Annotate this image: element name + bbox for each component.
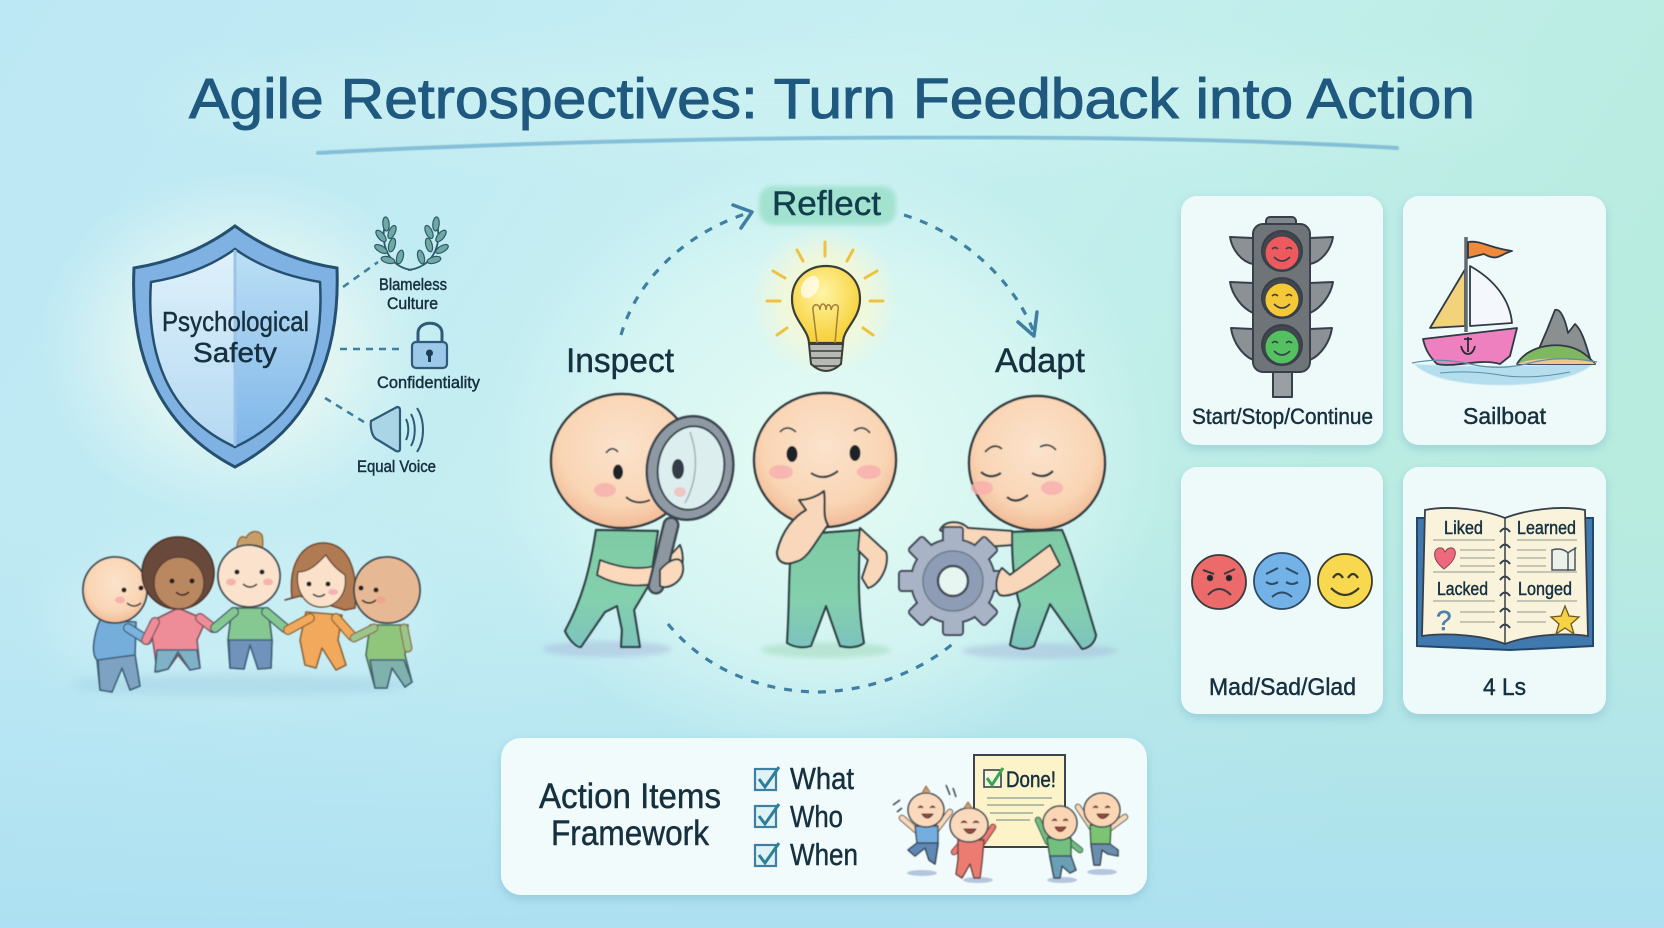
illustration: celebrating people [893,785,1125,883]
kid red [950,802,993,878]
label: blameless culture [379,276,447,313]
icon: padlock [412,323,447,368]
icon: sailboat [1412,237,1597,385]
checklist: what who when [755,761,858,872]
kid 4 [285,543,356,670]
label: adapt: Adapt [995,342,1086,380]
label: confidentiality: Confidentiality [377,374,481,392]
icon: star [1551,606,1579,634]
arrow: reflect to adapt [904,215,1037,336]
heading: Framework [551,814,709,853]
icon: traffic light [1230,217,1333,397]
illustration: done note [974,755,1065,847]
spiral binding [1500,528,1510,628]
label: Mad/Sad/Glad [1209,674,1356,701]
checklist: what who when: Who [790,799,843,834]
kid 1 [83,557,147,692]
kid 5 [354,557,420,688]
book labels: Longed [1518,579,1572,599]
arrow: adapt back to inspect [668,624,957,692]
icon: sad face [1254,553,1310,609]
card: 4 Ls [1403,467,1606,714]
shield label: Safety [193,337,277,368]
label: Sailboat [1463,403,1547,429]
icon: speaker [371,407,423,452]
kid lime [1078,793,1125,865]
card: mad sad glad [1181,467,1383,714]
icon: gear [899,527,1007,635]
checklist: what who when: What [790,761,854,796]
shield label: Psychological [162,306,309,337]
panel: inspect reflect adapt cycle [542,185,1118,692]
card: sailboat [1403,196,1606,445]
kid 3 [215,532,285,669]
connector dashes [325,262,405,422]
panel: psychological safety [134,217,481,476]
card: start stop continue [1181,196,1383,445]
icon: question mark: ? [1436,605,1452,636]
book labels: Lacked [1437,579,1488,599]
label: reflect: Reflect [772,185,882,223]
book labels: Learned [1517,518,1576,538]
character: adapt with gear [899,396,1118,659]
icon: mini book [1552,548,1576,571]
heading [539,777,721,853]
title underline [318,137,1397,153]
label: blameless culture: Blameless [379,276,447,294]
title: Agile Retrospectives: Turn Feedback into Action [189,67,1475,131]
label: equal voice: Equal Voice [357,458,436,476]
icon: laurel [373,217,450,270]
icon: glad face [1318,554,1372,608]
kid 2 [142,537,214,672]
label: 4 Ls [1483,674,1526,701]
icon: mad face [1192,555,1246,609]
icon: heart [1435,548,1455,569]
label: inspect: Inspect [566,342,675,380]
heading: Action Items [539,777,721,816]
icon: magnifying glass [639,409,741,586]
label: blameless culture: Culture [387,295,438,313]
book labels [1437,518,1576,599]
illustration: team holding hands [70,532,420,696]
kid blue [893,785,956,864]
panel: action items framework [501,738,1147,895]
checklist: what who when: When [790,837,858,872]
character: reflect thinking [754,393,896,658]
page rules [1433,540,1577,622]
book labels: Liked [1444,518,1483,538]
arrow: inspect to reflect [621,205,752,335]
reflect highlight [759,186,896,225]
shield label [162,306,309,368]
icon: light bulb [750,225,900,375]
kid green [1038,806,1080,878]
label: Start/Stop/Continue [1192,404,1373,429]
character: inspect with magnifier [542,394,741,657]
icon: open book [1417,508,1593,650]
illustration: done note: Done! [1006,767,1056,792]
icon: shield [134,226,337,467]
